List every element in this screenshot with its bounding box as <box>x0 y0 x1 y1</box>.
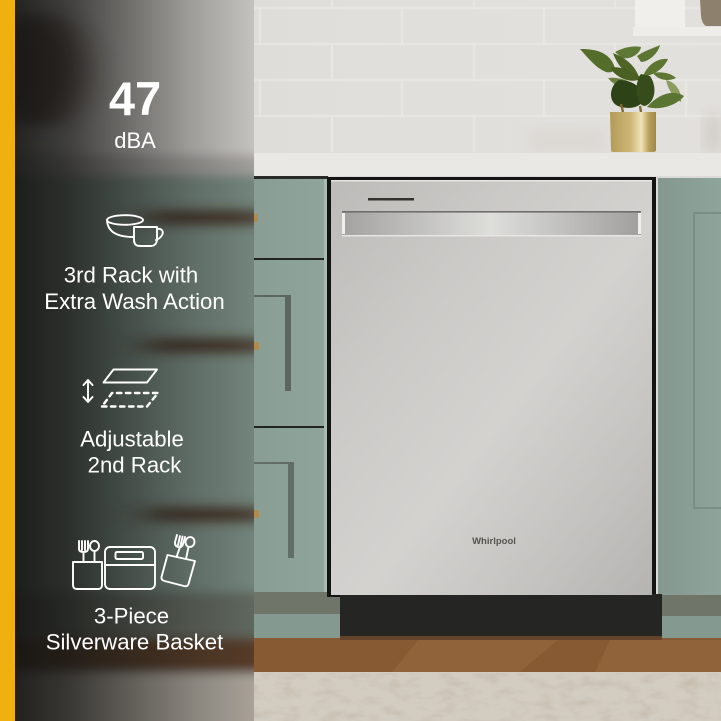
yellow accent bar <box>0 0 15 721</box>
dishwasher <box>327 177 662 636</box>
label: Silverware Basket <box>46 630 223 654</box>
steel door <box>331 180 652 595</box>
black frame <box>327 177 656 597</box>
rug <box>200 672 721 721</box>
door handle <box>342 211 641 236</box>
feature: silverware basket <box>46 535 223 654</box>
shelf with white box and upper pot <box>633 0 721 36</box>
stat: 47 dBA: dBA <box>114 128 156 153</box>
plant leaves <box>580 45 684 112</box>
countertop <box>254 153 721 176</box>
door inset <box>200 462 294 558</box>
right cabinet <box>658 178 721 640</box>
left blurred feature panel <box>15 0 254 721</box>
floor <box>200 636 721 673</box>
blurred dark plant shape <box>0 12 83 128</box>
brand logo: Whirlpool <box>472 536 516 547</box>
knobs <box>253 214 259 518</box>
label: 3rd Rack with <box>64 262 198 288</box>
control slot <box>368 198 414 200</box>
feature: 3rd rack <box>44 215 225 314</box>
feature: adjustable 2nd rack <box>80 370 184 478</box>
blurred handles <box>145 211 270 521</box>
stat: 47 dBA <box>109 72 161 153</box>
dark gradient overlay <box>15 0 254 721</box>
icon: bowl and cup <box>107 215 163 246</box>
potted plant <box>580 45 684 152</box>
background: tiled wall <box>0 0 721 155</box>
base <box>200 592 340 614</box>
blurred backdrop <box>15 8 254 721</box>
icon: three basket pieces <box>73 535 196 589</box>
icon: rack with up-down arrow <box>84 370 158 406</box>
left cabinets <box>200 176 342 638</box>
brass pot <box>610 112 656 152</box>
label: 2nd Rack <box>88 452 182 478</box>
label: 3-Piece <box>94 604 169 628</box>
stat: 47 dBA: 47 <box>109 72 161 125</box>
toe kick <box>340 594 662 636</box>
label: Adjustable <box>80 426 184 452</box>
label: Extra Wash Action <box>44 289 225 314</box>
drawer inset <box>200 295 291 391</box>
